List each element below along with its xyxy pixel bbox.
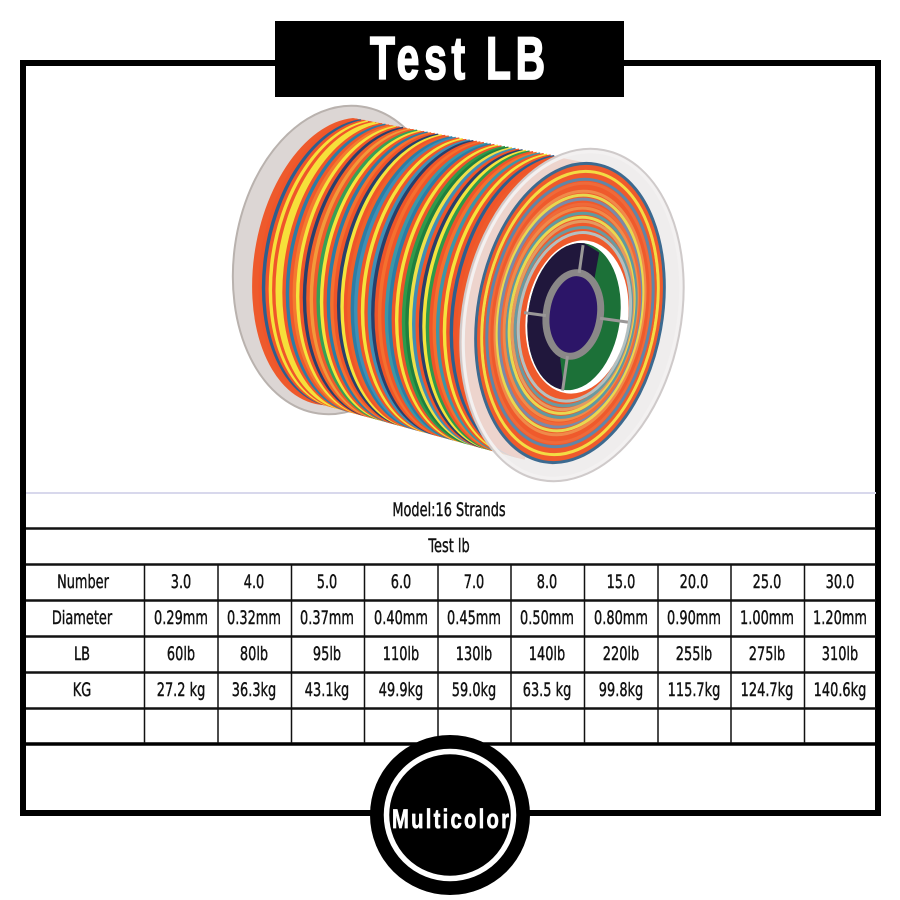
lb row: 80lb: [240, 642, 268, 665]
lb row: 130lb: [456, 642, 492, 665]
diameter row: 0.50mm: [520, 606, 574, 629]
wound line seen through flange: [453, 148, 687, 478]
diameter row: 1.00mm: [740, 606, 794, 629]
lb row: LB: [74, 642, 90, 665]
number row: 15.0: [607, 570, 635, 593]
number row: 30.0: [826, 570, 854, 593]
lb row: 60lb: [167, 642, 195, 665]
lb row: 140lb: [529, 642, 565, 665]
number row: 8.0: [537, 570, 557, 593]
lb row: 220lb: [603, 642, 639, 665]
wound line body: [252, 118, 583, 465]
number row: [57, 570, 854, 593]
specification table: [26, 493, 876, 744]
diameter row: 0.45mm: [447, 606, 501, 629]
number row: Number: [57, 570, 109, 593]
lb row: 255lb: [676, 642, 712, 665]
multicolor badge: Multicolor: [392, 804, 511, 835]
kg row: KG: [73, 678, 91, 701]
diameter row: 0.80mm: [594, 606, 648, 629]
number row: 7.0: [464, 570, 484, 593]
number row: 5.0: [317, 570, 337, 593]
kg row: 59.0kg: [452, 678, 496, 701]
front flange: [433, 129, 711, 501]
kg row: 124.7kg: [741, 678, 793, 701]
lb row: 275lb: [749, 642, 785, 665]
test lb row: Test lb: [428, 534, 470, 557]
kg row: 99.8kg: [599, 678, 643, 701]
table rules: [26, 493, 876, 744]
kg row: 36.3kg: [232, 678, 276, 701]
lb row: [74, 642, 858, 665]
number row: 25.0: [753, 570, 781, 593]
title banner: Test LB: [370, 25, 550, 92]
lb row: 95lb: [313, 642, 341, 665]
diameter row: 0.29mm: [154, 606, 208, 629]
diameter row: 0.32mm: [227, 606, 281, 629]
outer frame: [23, 63, 878, 813]
diameter row: 0.90mm: [667, 606, 721, 629]
kg row: 27.2 kg: [157, 678, 205, 701]
diameter row: Diameter: [52, 606, 112, 629]
diameter row: 0.37mm: [300, 606, 354, 629]
multicolor badge: [370, 735, 530, 895]
kg row: 63.5 kg: [523, 678, 571, 701]
lb row: 310lb: [822, 642, 858, 665]
kg row: [73, 678, 866, 701]
back flange: [213, 92, 467, 428]
lb row: 110lb: [383, 642, 419, 665]
centre hole: [514, 233, 638, 400]
model row: Model:16 Strands: [392, 498, 506, 521]
spool of multicolor braided line: [213, 92, 711, 501]
number row: 6.0: [391, 570, 411, 593]
number row: 4.0: [244, 570, 264, 593]
kg row: 140.6kg: [814, 678, 866, 701]
diameter row: 0.40mm: [374, 606, 428, 629]
kg row: 43.1kg: [305, 678, 349, 701]
number row: 3.0: [171, 570, 191, 593]
kg row: 115.7kg: [668, 678, 720, 701]
title banner: [275, 21, 624, 97]
number row: 20.0: [680, 570, 708, 593]
diameter row: 1.20mm: [813, 606, 867, 629]
diameter row: [52, 606, 867, 629]
kg row: 49.9kg: [379, 678, 423, 701]
